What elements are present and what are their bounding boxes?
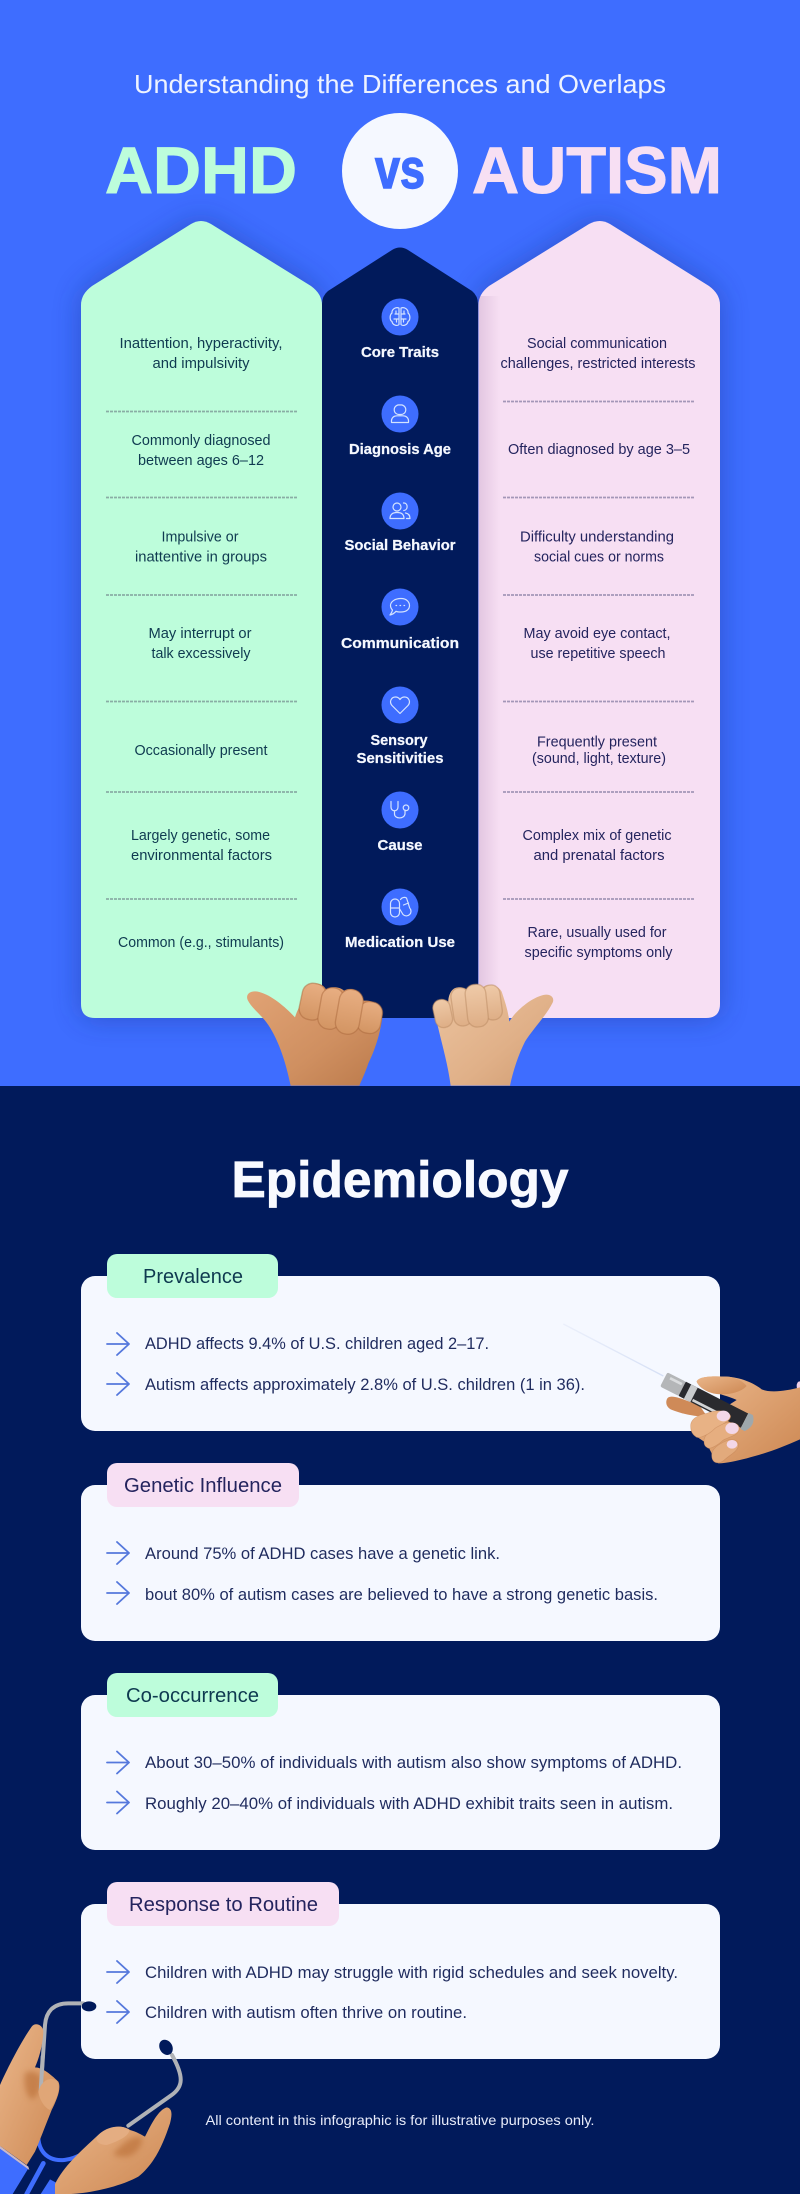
tab: Co-occurrence: Co-occurrence — [126, 1685, 259, 1707]
footer note: All content in this infographic is for illustrative purposes only. — [206, 2112, 594, 2128]
icon: person — [382, 396, 418, 432]
text: ADHD prevalence: ADHD affects 9.4% of U.S. children aged 2–17. — [145, 1335, 489, 1353]
Autism: core traits — [500, 336, 696, 372]
Autism: medication: specific symptoms only — [524, 945, 673, 961]
Autism: cause: and prenatal factors — [534, 848, 664, 864]
panel: Autism column — [478, 221, 720, 1018]
tab: Genetic Influence: Genetic Influence — [124, 1475, 282, 1497]
card: Co-occurrence — [81, 1673, 720, 1850]
text: autism with ADHD: About 30–50% of individuals with autism also show symptoms of ADHD. — [145, 1754, 682, 1772]
arrow — [107, 1542, 129, 1564]
subtitle: Understanding the Differences and Overlaps — [134, 69, 666, 99]
card: Response to Routine — [81, 1882, 720, 2059]
title: AUTISM: AUTISM — [472, 133, 722, 207]
arrow — [107, 1961, 129, 1983]
Autism: medication: Rare, usually used for — [528, 925, 667, 941]
icon: brain — [382, 298, 418, 336]
tab: Response to Routine: Response to Routine — [129, 1894, 318, 1916]
icon: chat bubble — [382, 588, 418, 626]
title: ADHD: ADHD — [105, 133, 297, 207]
ADHD: communication — [148, 626, 252, 662]
ADHD: social behavior: inattentive in groups — [135, 550, 267, 566]
card: Prevalence — [81, 1254, 720, 1431]
arrow — [107, 1752, 129, 1774]
illustration: hands holding stethoscope — [0, 2001, 181, 2194]
label: Sensory Sensitivities — [356, 733, 444, 767]
Autism: communication: May avoid eye contact, — [524, 626, 670, 642]
text: autism routine: Children with autism often thrive on routine. — [145, 2004, 467, 2022]
Autism: sensory: Frequently present — [537, 734, 657, 750]
arrow — [107, 1582, 129, 1604]
ADHD: diagnosis age: between ages 6–12 — [138, 453, 264, 469]
Autism: core traits: Social communication — [527, 336, 667, 352]
Autism: cause: Complex mix of genetic — [522, 828, 672, 844]
tab: Co-occurrence — [107, 1673, 278, 1717]
ADHD: core traits: and impulsivity — [152, 356, 250, 372]
vs badge: vs — [375, 137, 425, 200]
illustration: hand holding laser pointer — [563, 1324, 800, 1463]
label: Communication: Communication — [341, 636, 459, 652]
ADHD: cause — [131, 828, 272, 864]
tab: Prevalence — [107, 1254, 278, 1298]
Autism: medication — [524, 925, 673, 961]
vs badge — [342, 113, 458, 229]
label: Core Traits: Core Traits — [361, 345, 439, 361]
ADHD: diagnosis age: Commonly diagnosed — [132, 433, 270, 449]
ADHD: sensory: Occasionally present — [134, 743, 268, 759]
Autism: cause — [522, 828, 672, 864]
Autism: sensory — [532, 734, 666, 767]
icon: people — [382, 492, 418, 530]
ADHD: communication: talk excessively — [152, 646, 251, 662]
panel: ADHD column — [81, 221, 322, 1018]
icon: pills — [382, 888, 418, 926]
arrow — [107, 1373, 129, 1395]
ADHD: core traits: Inattention, hyperactivity, — [120, 336, 282, 352]
ADHD: cause: Largely genetic, some — [131, 828, 270, 844]
ADHD: core traits — [120, 336, 282, 372]
earpieces — [82, 2001, 175, 2057]
card: Genetic Influence — [81, 1463, 720, 1641]
Autism: core traits: challenges, restricted interests — [500, 356, 696, 372]
ADHD: communication: May interrupt or — [148, 626, 252, 642]
label: Diagnosis Age: Diagnosis Age — [349, 442, 451, 458]
label: Sensory Sensitivities: Sensitivities — [356, 751, 444, 767]
Autism: social behavior: Difficulty understanding — [520, 530, 674, 546]
tab: Genetic Influence — [107, 1463, 299, 1507]
icon: stethoscope — [382, 792, 418, 828]
icon: heart — [382, 686, 418, 724]
text: ADHD genetics: Around 75% of ADHD cases have a genetic link. — [145, 1545, 500, 1563]
arrow — [107, 1333, 129, 1355]
heading: Epidemiology: Epidemiology — [232, 1151, 569, 1208]
stethoscope tubing — [27, 2003, 181, 2194]
illustration: left thumbs-up hand — [247, 981, 384, 1086]
ADHD: social behavior — [135, 530, 267, 566]
label: Sensory Sensitivities: Sensory — [370, 733, 428, 749]
arrow — [107, 1792, 129, 1814]
Autism: communication — [524, 626, 670, 662]
tab: Response to Routine — [107, 1882, 339, 1926]
text: ADHD with autism: Roughly 20–40% of individuals with ADHD exhibit traits seen in autism. — [145, 1795, 673, 1813]
label: Cause: Cause — [378, 838, 422, 854]
Autism: social behavior: social cues or norms — [534, 550, 664, 566]
ADHD: cause: environmental factors — [131, 848, 272, 864]
Autism: social behavior — [520, 530, 674, 566]
background: blue top section — [0, 0, 800, 1086]
illustration: right thumbs-up hand — [431, 983, 553, 1086]
ADHD: diagnosis age — [132, 433, 270, 469]
tab: Prevalence: Prevalence — [143, 1266, 243, 1288]
label: Medication Use: Medication Use — [345, 935, 455, 951]
label: Social Behavior: Social Behavior — [344, 538, 456, 554]
text: Autism genetics: bout 80% of autism cases are believed to have a strong genetic basis. — [145, 1586, 658, 1604]
ADHD: social behavior: Impulsive or — [162, 530, 239, 546]
Autism: diagnosis age: Often diagnosed by age 3–5 — [508, 442, 690, 458]
text: Autism prevalence: Autism affects approximately 2.8% of U.S. children (1 in 36). — [145, 1376, 585, 1394]
background: navy bottom section — [0, 1086, 800, 2194]
panel: center categories column — [322, 248, 478, 1018]
ADHD: medication: Common (e.g., stimulants) — [118, 935, 284, 951]
text: ADHD routine: Children with ADHD may struggle with rigid schedules and seek novelty. — [145, 1964, 678, 1982]
arrow — [107, 2001, 129, 2023]
panel shadow — [81, 221, 720, 1018]
Autism: sensory: (sound, light, texture) — [532, 751, 666, 767]
Autism: communication: use repetitive speech — [530, 646, 666, 662]
